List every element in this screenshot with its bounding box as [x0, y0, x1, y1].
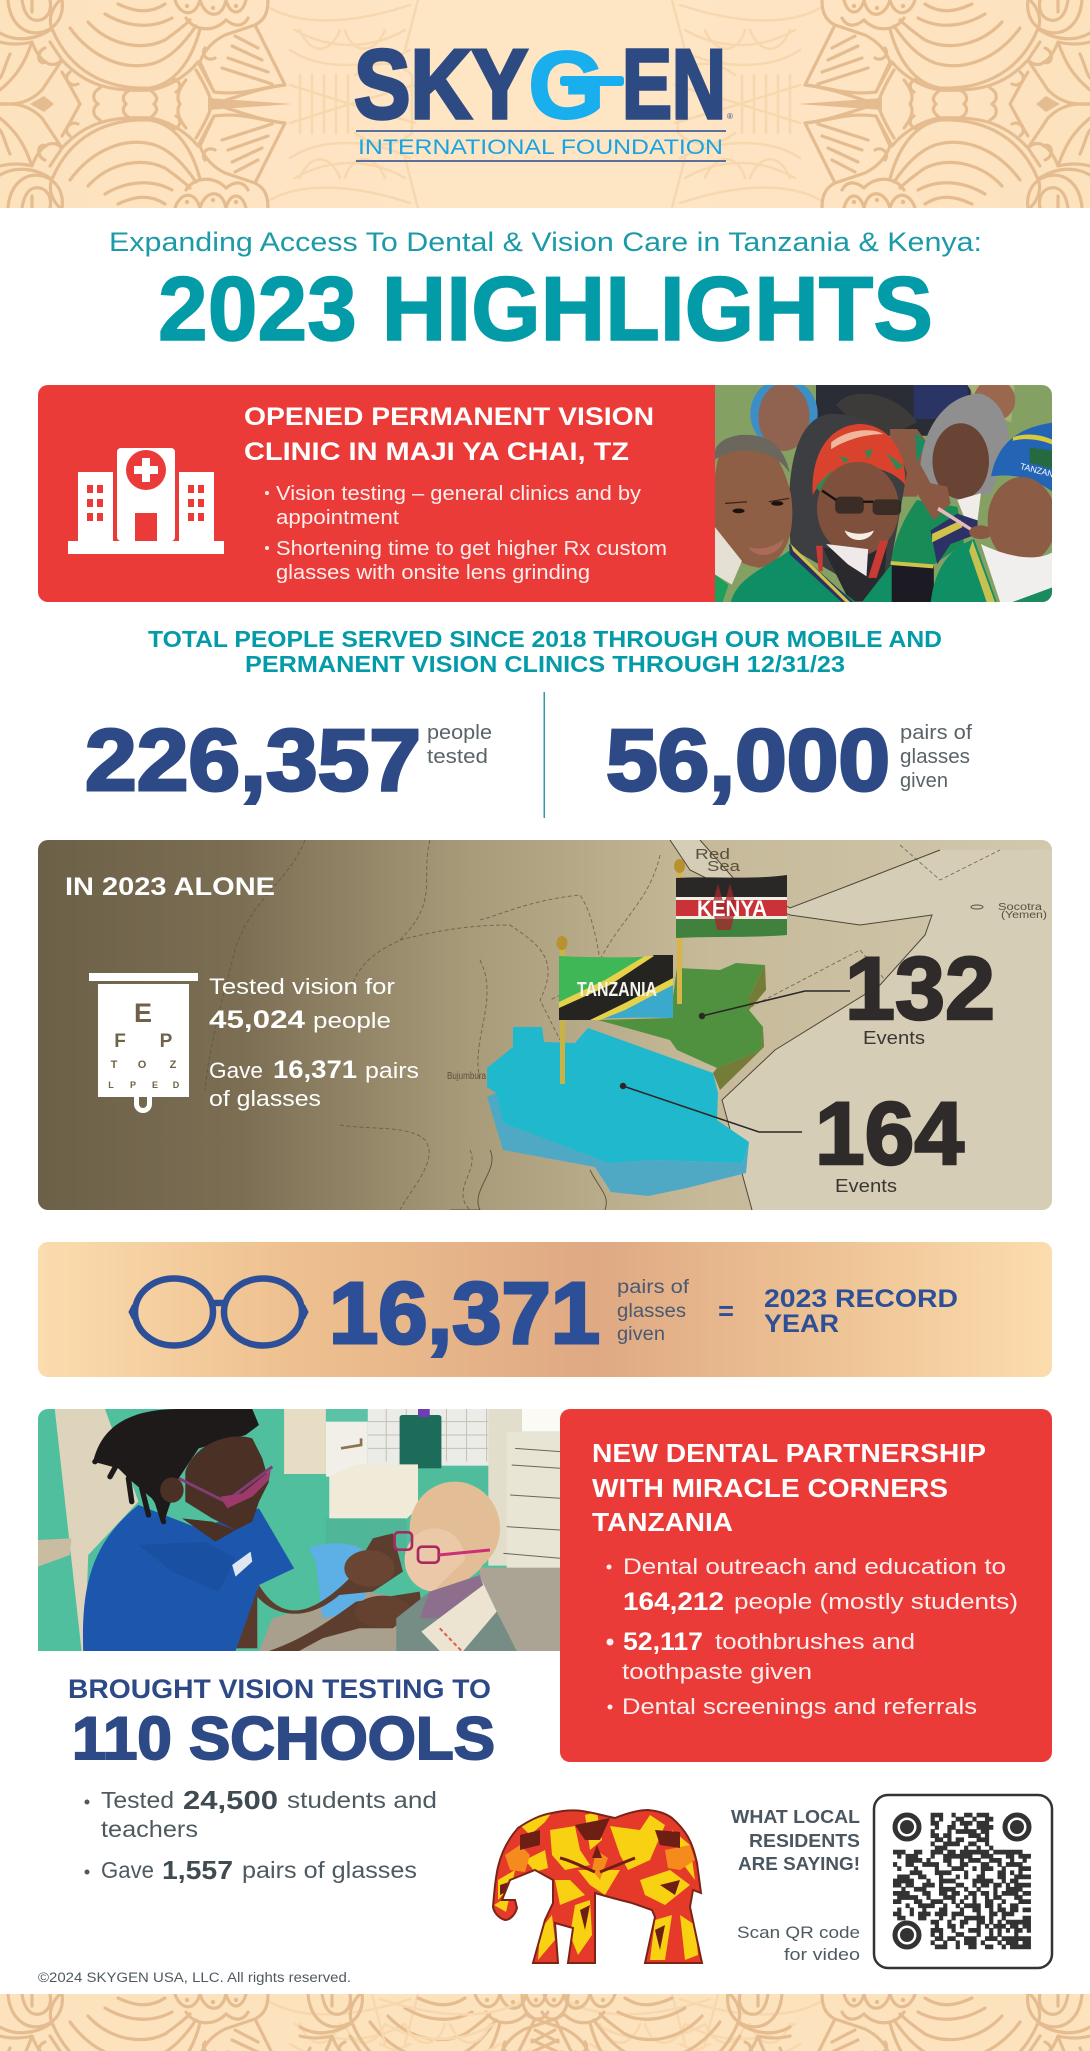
2023 vision results text: 45,024	[209, 1006, 305, 1034]
icon: eye chart: P	[130, 1080, 136, 1090]
stat: people tested: tested	[427, 746, 488, 768]
photo: students in uniforms	[712, 378, 1063, 605]
2023 vision results text: of glasses	[209, 1086, 321, 1111]
bullet list: Dental outreach and education to	[623, 1554, 1006, 1579]
panel heading: CLINIC IN MAJI YA CHAI, TZ	[244, 438, 629, 466]
map background: sea and borders: Sea	[707, 858, 741, 875]
number caption: given	[617, 1324, 665, 1345]
stat: people tested: people	[427, 722, 492, 744]
record year label: YEAR	[764, 1310, 839, 1338]
panel heading: NEW DENTAL PARTNERSHIP	[592, 1438, 986, 1468]
bullet list: schools results: pairs of glasses	[242, 1857, 417, 1883]
subtitle: Expanding Access To Dental & Vision Care in Tanzania & Kenya:	[109, 227, 982, 257]
2023 vision results text: pairs	[365, 1058, 419, 1083]
logo	[354, 29, 733, 162]
equals sign: =	[718, 1296, 734, 1326]
2023 vision results text: Tested vision for	[209, 974, 395, 999]
text: scan QR code for video: for video	[784, 1945, 860, 1964]
Tanzania events count: Events	[835, 1176, 897, 1196]
logo: G	[528, 32, 605, 139]
bullet list: schools results: students and	[287, 1787, 437, 1813]
stat: pairs of glasses given: pairs of	[900, 722, 972, 744]
record year label: 2023 RECORD	[764, 1285, 958, 1313]
heading: schools: 110 SCHOOLS	[72, 1705, 495, 1772]
stat: pairs of glasses given: glasses	[900, 746, 970, 768]
icon: eye chart: D	[173, 1080, 180, 1090]
bullet list: schools results: teachers	[101, 1816, 198, 1842]
flag: Kenya: KENYA	[697, 896, 767, 921]
icon: eye chart: E	[152, 1080, 158, 1090]
panel: permanent vision clinic	[38, 385, 715, 602]
panel heading: WITH MIRACLE CORNERS	[592, 1473, 948, 1503]
panel heading: TANZANIA	[592, 1507, 733, 1537]
panel heading	[592, 1438, 986, 1537]
2023 vision results text: Gave	[209, 1058, 263, 1083]
text: what local residents are saying: ARE SAYING!	[738, 1854, 860, 1874]
bullet list: toothpaste given	[622, 1659, 812, 1684]
Tanzania events count: 164	[815, 1083, 964, 1183]
title: 2023 HIGHLIGHTS	[158, 259, 933, 360]
map background: sea and borders: (Yemen)	[1001, 910, 1047, 921]
stat: people tested: 226,357	[85, 712, 421, 809]
stat: pairs of glasses given: 56,000	[606, 712, 890, 809]
icon: eye chart: O	[138, 1059, 147, 1071]
heading: schools	[68, 1674, 495, 1772]
logo: INTERNATIONAL FOUNDATION	[358, 136, 723, 159]
Kenya events count: 132	[845, 938, 995, 1038]
bullet list: 164,212	[623, 1588, 724, 1616]
map background: sea and borders: Bujumbura	[447, 1071, 486, 1082]
bullet list: schools results: Tested	[101, 1787, 174, 1813]
icon: eye chart: Z	[170, 1059, 177, 1071]
bullet list: 52,117	[623, 1628, 703, 1656]
bullet list: Dental screenings and referrals	[622, 1694, 977, 1719]
photo: fitting glasses on a child	[38, 1405, 563, 1655]
icon: eye chart: F	[114, 1031, 126, 1052]
logo: SKY	[354, 29, 528, 139]
2023 vision results text: 16,371	[273, 1056, 357, 1084]
record year label	[764, 1285, 958, 1338]
bullet list: appointment	[276, 507, 399, 529]
connector lines	[620, 991, 850, 1132]
logo: ®	[727, 112, 733, 121]
header band with mandala pattern and logo	[0, 0, 1090, 208]
photo: students in uniforms: TANZANIA	[1019, 461, 1063, 481]
heading: schools: BROUGHT VISION TESTING TO	[68, 1674, 491, 1704]
bullet list: glasses with onsite lens grinding	[276, 562, 590, 584]
map background: sea and borders: Red	[695, 846, 730, 863]
bullet list: schools results: 1,557	[162, 1855, 233, 1885]
icon: eye chart	[89, 973, 198, 1113]
stat: pairs of glasses given: given	[900, 770, 948, 792]
copyright: ©2024 SKYGEN USA, LLC. All rights reserved.	[38, 1970, 351, 1985]
panel heading	[244, 403, 654, 466]
QR code	[874, 1795, 1052, 1968]
heading: total people served: PERMANENT VISION CLINICS THROUGH 12/31/23	[245, 651, 845, 677]
bullet list: schools results	[84, 1785, 437, 1885]
bullet list: Shortening time to get higher Rx custom	[276, 538, 667, 560]
number caption: pairs of	[617, 1277, 690, 1298]
panel: new dental partnership	[560, 1409, 1052, 1762]
bullet list	[265, 483, 667, 584]
panel: in 2023 alone map	[38, 840, 1052, 1210]
logo: EN	[622, 29, 726, 139]
bullet list	[606, 1554, 1018, 1719]
text: what local residents are saying: RESIDENTS	[749, 1831, 860, 1851]
footer band with mandala pattern	[0, 1994, 1090, 2051]
map background: sea and borders: Socotra	[998, 902, 1043, 913]
2023 vision results text	[209, 974, 419, 1111]
panel heading: OPENED PERMANENT VISION	[244, 403, 654, 431]
heading: total people served	[148, 626, 942, 677]
flag: Kenya	[674, 859, 787, 1004]
icon: eye chart: P	[160, 1031, 173, 1052]
bullet list: schools results: 24,500	[183, 1785, 278, 1815]
icon: decorated elephant	[492, 1809, 704, 1964]
text: what local residents are saying: WHAT LOCAL	[731, 1807, 860, 1827]
panel heading: IN 2023 ALONE	[65, 873, 275, 901]
panel: record year banner	[38, 1242, 1052, 1377]
number caption: glasses	[617, 1301, 686, 1322]
icon: eye chart: T	[111, 1059, 118, 1071]
heading: total people served: TOTAL PEOPLE SERVED SINCE 2018 THROUGH OUR MOBILE AND	[148, 626, 942, 652]
flag: Tanzania	[556, 936, 673, 1084]
icon: hospital	[68, 448, 224, 554]
flag: Tanzania: TANZANIA	[577, 979, 657, 1001]
icon: eye chart: L	[108, 1080, 114, 1090]
bullet list: Vision testing – general clinics and by	[276, 483, 641, 505]
Kenya events count: Events	[863, 1028, 925, 1048]
icon: glasses	[132, 1278, 305, 1346]
map background: sea and borders	[205, 840, 1052, 1210]
record number: 16,371	[329, 1265, 600, 1362]
map: Kenya	[598, 963, 766, 1090]
map: Tanzania	[487, 1027, 749, 1196]
bullet list: schools results: Gave	[101, 1857, 154, 1883]
bullet list: people (mostly students)	[734, 1589, 1018, 1614]
text: scan QR code for video	[737, 1923, 860, 1964]
bullet list: toothbrushes and	[715, 1629, 915, 1654]
2023 vision results text: people	[313, 1008, 391, 1033]
text: scan QR code for video: Scan QR code	[737, 1923, 860, 1942]
text: what local residents are saying	[731, 1807, 860, 1874]
number caption	[617, 1277, 690, 1345]
icon: eye chart: E	[134, 998, 152, 1028]
